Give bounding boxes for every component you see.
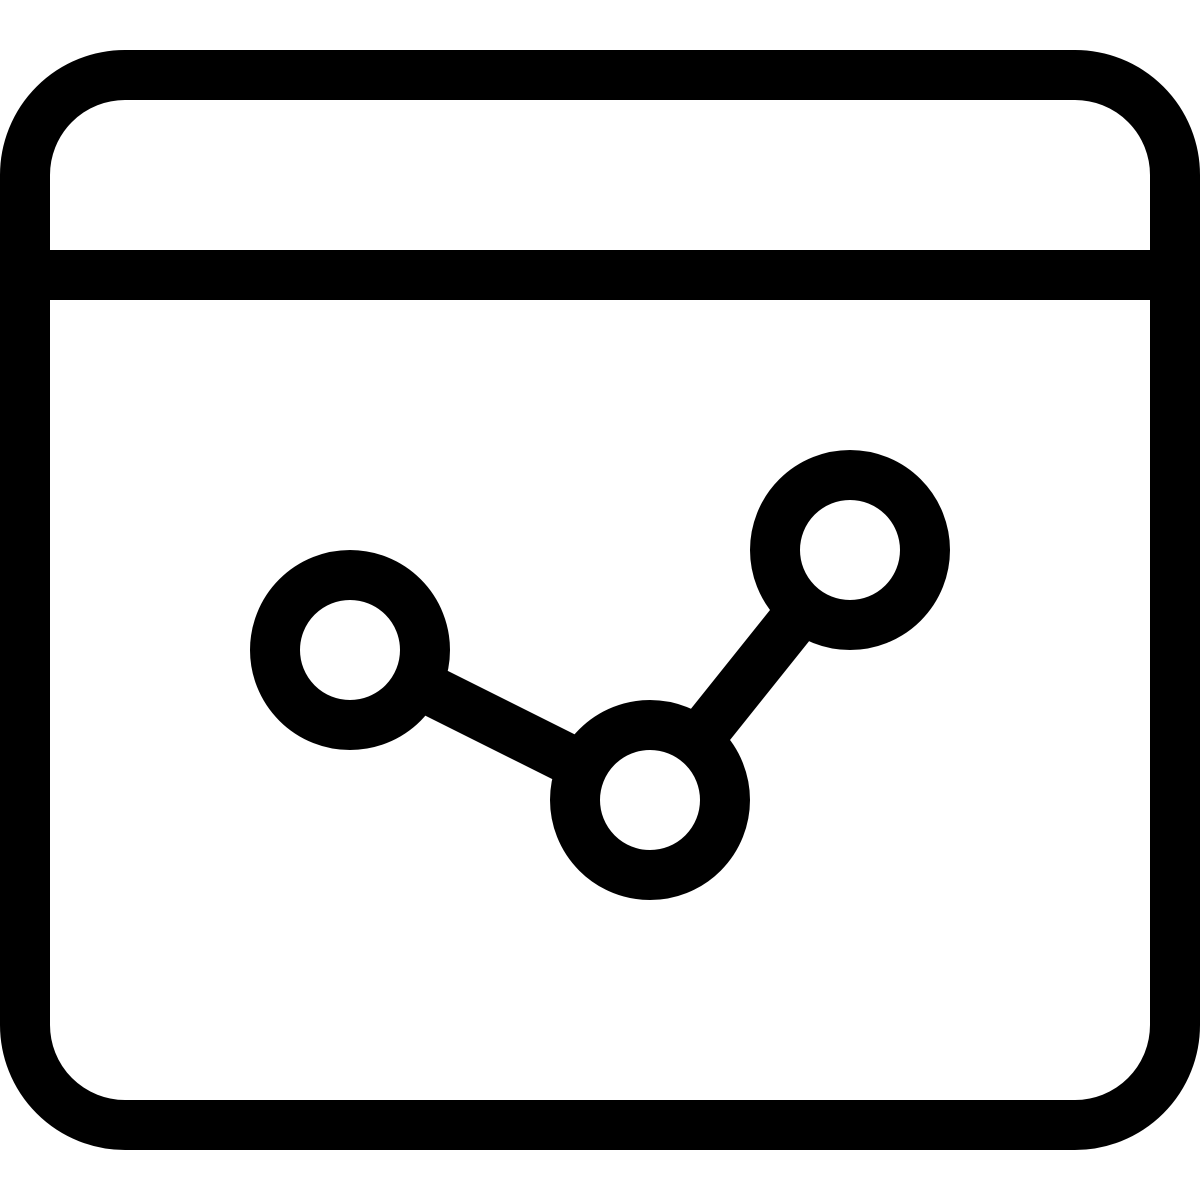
chart line <box>350 550 850 800</box>
title bar divider <box>25 250 1175 300</box>
data points <box>275 475 925 875</box>
